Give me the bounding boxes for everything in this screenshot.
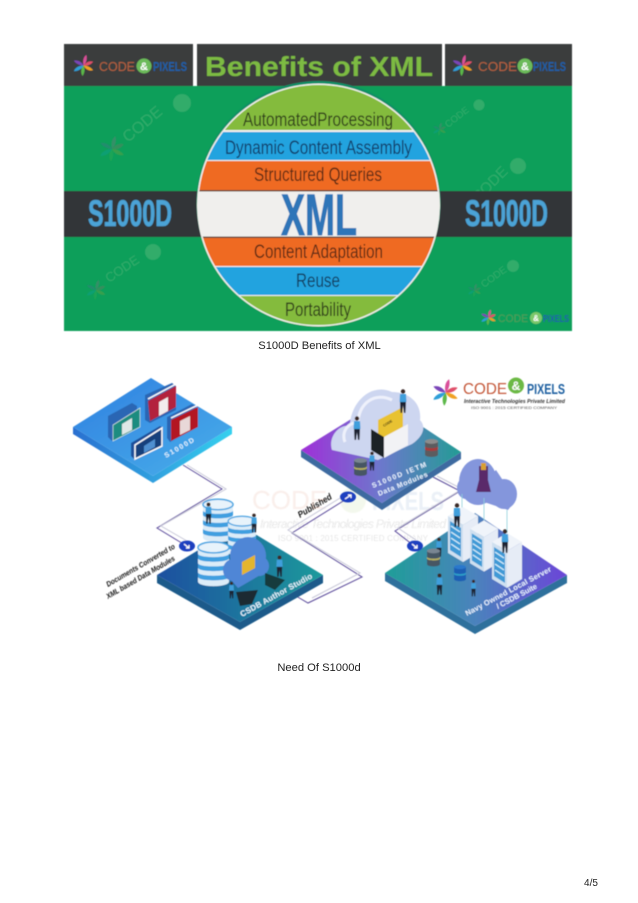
faint centre watermark — [252, 485, 446, 543]
cloud links — [462, 494, 507, 536]
faint centre watermark: CODE — [252, 485, 327, 515]
XML heading: XML — [281, 183, 357, 248]
watermarks on green: CODE — [102, 252, 142, 285]
platform label: CSDB Author Studio — [239, 572, 314, 619]
benefit: Automated Processing: AutomatedProcessing — [243, 110, 393, 131]
panel: benefits of XML banner — [64, 44, 572, 331]
company logo — [433, 378, 565, 410]
folder: pdf — [167, 404, 198, 442]
benefit: Content Adaptation: Content Adaptation — [254, 242, 383, 263]
header right logo box: CODE — [478, 59, 517, 74]
company logo: & — [512, 379, 521, 393]
platform label: S1000D — [164, 437, 196, 460]
arrow badge: S1000D to CSDB — [179, 540, 195, 552]
label: published: Published — [296, 491, 334, 520]
platform label: Data Modules — [377, 471, 429, 498]
green banner background — [64, 86, 572, 331]
folder icon — [242, 555, 255, 575]
navy cloud with emblem — [457, 459, 517, 510]
platform: CSDB Author Studio — [157, 499, 323, 630]
header left logo box: PIXELS — [153, 59, 187, 74]
benefit: Dynamic Content Assembly: Dynamic Content Assembly — [225, 138, 412, 159]
dark horizontal band with S1000D labels: S1000D — [465, 193, 548, 234]
folder: video — [145, 383, 176, 423]
connector: S1000D to CSDB — [157, 465, 226, 545]
platform label: Navy Owned Local Server — [464, 565, 553, 618]
server racks — [448, 507, 522, 588]
watermarks on green — [87, 94, 526, 300]
header right logo box — [445, 44, 572, 86]
header left logo box — [64, 44, 193, 86]
header left logo box: CODE — [99, 59, 135, 74]
header right logo box: PIXELS — [533, 59, 566, 74]
platform label: / CSDB Suite — [495, 582, 539, 611]
caption: S1000D Benefits of XML: S1000D Benefits of XML — [258, 340, 381, 352]
connector: CSDB to IETM published — [288, 495, 362, 603]
company logo: CODE — [463, 381, 507, 398]
label: documents converted: XML based Data Modules — [104, 554, 177, 601]
watermarks on green: CODE — [469, 163, 511, 206]
benefit: Portability: Portability — [285, 300, 351, 321]
watermarks on green: CODE — [443, 105, 471, 130]
database drums — [354, 439, 438, 476]
page number: 4/5 — [584, 878, 598, 889]
circle of XML benefits — [190, 80, 450, 331]
faint centre watermark: Interactive Technologies Private Limited — [260, 517, 446, 531]
bottom right logo: PIXELS — [543, 314, 569, 325]
connector: IETM to local server — [395, 476, 462, 545]
watermarks on green: CODE — [120, 103, 166, 146]
bottom right logo — [481, 310, 569, 325]
circle outline — [197, 84, 440, 326]
benefit: Reuse: Reuse — [296, 271, 340, 292]
diagram: need of S1000D — [73, 378, 567, 634]
yellow folder cabinet: CODE — [382, 419, 394, 428]
dark horizontal band with S1000D labels — [64, 191, 572, 237]
watermarks on green: CODE — [479, 264, 509, 290]
database drums — [427, 549, 466, 581]
cloud — [223, 537, 269, 588]
benefit: Structured Queries: Structured Queries — [254, 165, 382, 186]
company logo: Interactive Technologies Private Limited — [464, 399, 565, 405]
arrow badge: IETM to server — [407, 540, 423, 552]
platform label: S1000D IETM — [371, 462, 428, 490]
company logo: ISO 9001 : 2015 CERTIFIED COMPANY — [471, 405, 557, 410]
cloud — [331, 390, 423, 460]
dark horizontal band with S1000D labels: S1000D — [88, 193, 172, 234]
faint centre watermark: PIXELS — [372, 486, 444, 516]
header title box — [197, 44, 442, 86]
platform: navy owned local server — [385, 459, 567, 634]
faint centre watermark: ISO 9001 : 2015 CERTIFIED COMPANY — [278, 534, 429, 543]
caption: Need Of S1000d: Need Of S1000d — [277, 662, 361, 674]
company logo: PIXELS — [527, 381, 565, 398]
people at IETM — [354, 389, 406, 471]
circle shadow — [196, 81, 440, 325]
header title box: Benefits of XML — [205, 51, 433, 82]
platform: S1000D — [73, 378, 232, 483]
yellow folder cabinet — [371, 407, 408, 458]
arrow badge: Published — [340, 492, 356, 502]
people at CSDB — [205, 502, 285, 606]
coloured bands — [198, 84, 438, 326]
people at server — [436, 503, 508, 596]
header left logo box: & — [140, 61, 148, 73]
bottom right logo: CODE — [498, 313, 528, 325]
header right logo box: & — [521, 61, 529, 73]
folder: document — [108, 403, 140, 441]
folder: image — [131, 426, 163, 460]
bottom right logo: & — [533, 314, 539, 323]
label: documents converted: Documents Converted to — [104, 542, 177, 589]
database stacks — [198, 499, 256, 586]
platform: S1000D IETM data modules — [301, 389, 461, 510]
